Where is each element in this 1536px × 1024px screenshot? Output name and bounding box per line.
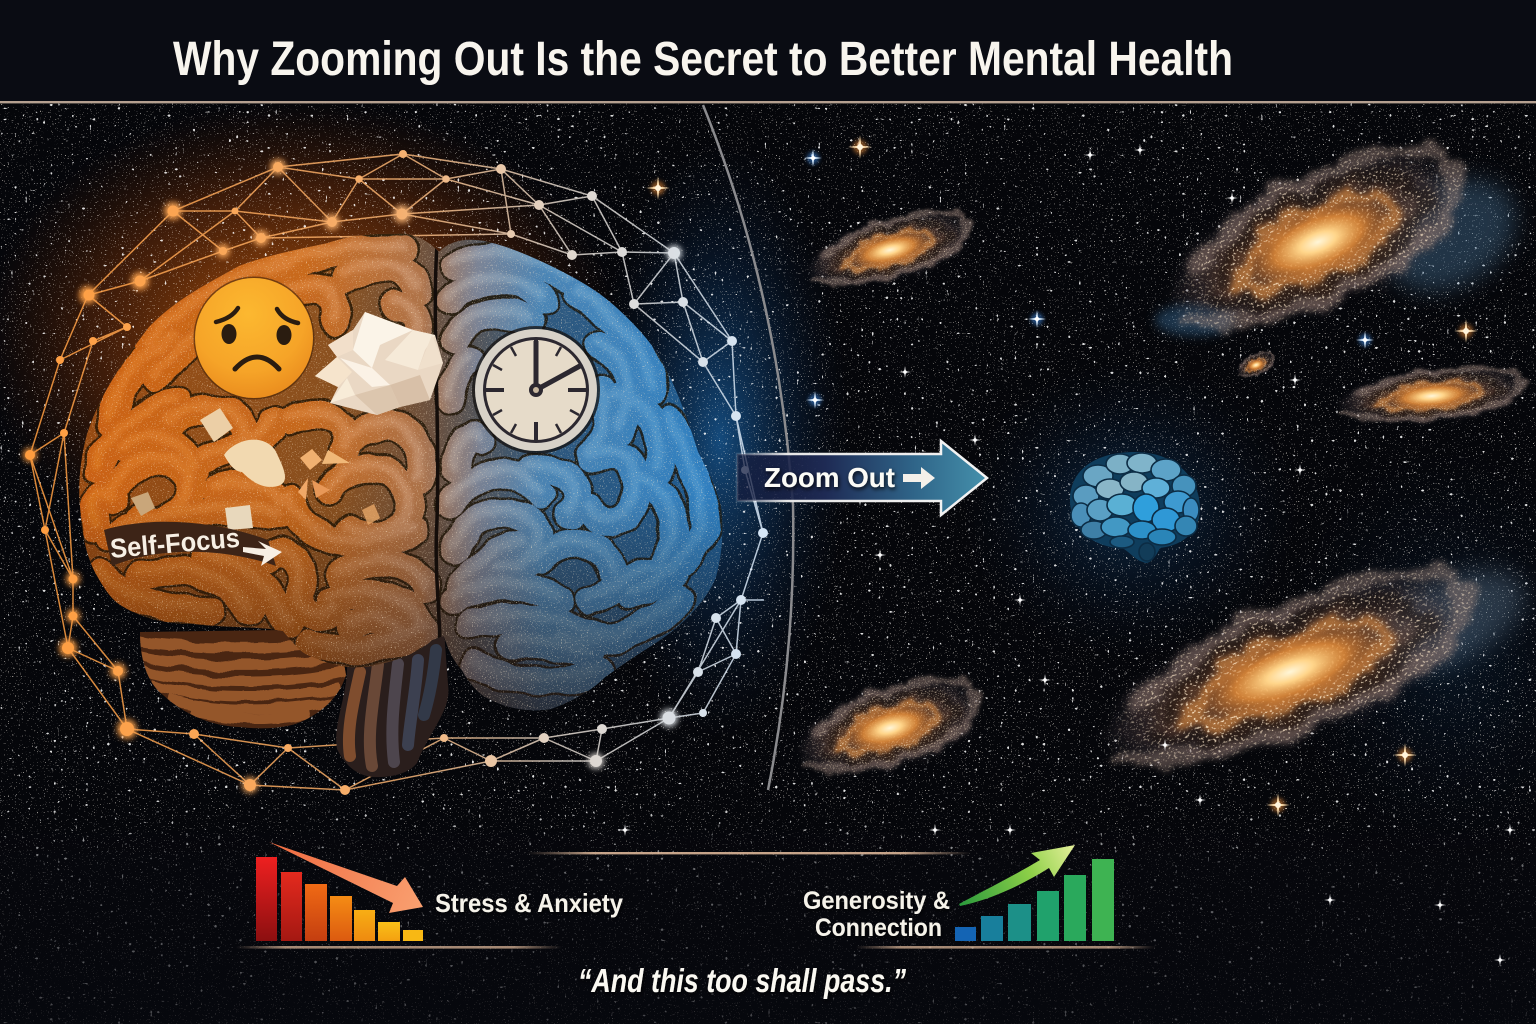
panel: bottom band darkening bbox=[0, 800, 1536, 1024]
chart: Stress & Anxiety falling bars bbox=[256, 842, 623, 941]
galaxy: right small bbox=[1335, 361, 1529, 431]
label: Stress & Anxiety: Stress & Anxiety bbox=[435, 888, 623, 918]
icon: worried emoji bbox=[194, 276, 314, 400]
header band bbox=[0, 0, 1536, 103]
icon: clock bbox=[472, 326, 600, 454]
cerebrum hemispheres bbox=[70, 225, 730, 715]
quote: “And this too shall pass.” bbox=[578, 962, 906, 999]
rule lines around the charts bbox=[236, 852, 1155, 949]
central fissure bbox=[435, 245, 440, 650]
arrow: Zoom Out: Zoom Out bbox=[764, 462, 895, 493]
galaxy: upper centre bbox=[800, 199, 980, 301]
title: Why Zooming Out Is the Secret to Better Mental Health bbox=[173, 33, 1233, 86]
cerebellum bbox=[140, 630, 346, 728]
galaxy: lower right large bbox=[1078, 537, 1536, 807]
large brain bbox=[70, 225, 730, 777]
label: Self-Focus ribbon: Self-Focus bbox=[109, 523, 241, 564]
sparkling stars bbox=[619, 135, 1516, 966]
network web around the brain bbox=[23, 150, 768, 795]
galaxy: tiny cluster bbox=[1233, 348, 1279, 382]
galaxy: lower left of cosmos bbox=[787, 663, 993, 793]
galaxy: upper right large bbox=[1143, 117, 1536, 367]
arrow: rising bbox=[959, 845, 1075, 906]
chart: Generosity & Connection rising bars bbox=[803, 845, 1114, 942]
arrow: Zoom Out bbox=[737, 441, 987, 515]
curved divider between brain and cosmos bbox=[703, 105, 793, 790]
fragments scattered on the left lobe bbox=[131, 408, 380, 530]
label: Generosity & Connection: Connection bbox=[815, 914, 942, 942]
label: Generosity & Connection: Generosity & bbox=[803, 887, 950, 915]
label: Generosity & Connection bbox=[803, 887, 950, 942]
arrow: falling bbox=[269, 842, 423, 913]
brainstem bbox=[336, 630, 448, 777]
icon: crumpled paper bbox=[315, 312, 443, 415]
small blue brain bbox=[1070, 452, 1200, 563]
